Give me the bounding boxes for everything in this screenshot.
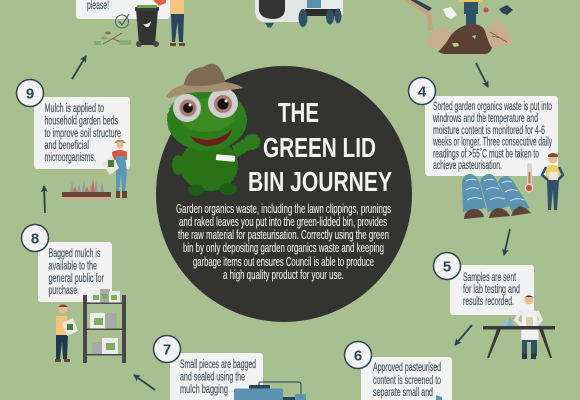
badge 6: 6 bbox=[354, 348, 362, 364]
icon: check mark bbox=[116, 14, 129, 28]
frog mouth bbox=[190, 129, 232, 146]
arrow bbox=[44, 186, 45, 213]
title: BIN JOURNEY bbox=[248, 166, 392, 197]
icon: person bbox=[153, 0, 185, 46]
intro paragraph: Garden organics waste, including the lawn clippings, prunings bbox=[176, 202, 391, 216]
card bbox=[425, 96, 558, 176]
frog eyes bbox=[173, 88, 238, 122]
card text bbox=[48, 248, 104, 297]
card text: Bagged mulch is bbox=[48, 248, 101, 260]
badge 4 bbox=[408, 78, 436, 104]
step 6 panel bbox=[344, 342, 452, 400]
badge 7: 7 bbox=[163, 342, 171, 358]
card text bbox=[180, 359, 256, 396]
badge 8: 8 bbox=[31, 230, 39, 248]
icon: person with clipboard bbox=[542, 153, 563, 210]
intro paragraph bbox=[176, 202, 391, 282]
card text: and sealed using the bbox=[180, 372, 245, 384]
card text: microorganisms. bbox=[44, 152, 96, 164]
step 2 illustration: collection truck bbox=[255, 0, 343, 28]
card text: separate small and bbox=[373, 387, 433, 399]
frog hat bbox=[166, 64, 243, 98]
card text bbox=[373, 362, 441, 399]
card text: Samples are sent bbox=[463, 272, 516, 284]
card text bbox=[463, 272, 520, 308]
card text: general public for bbox=[48, 273, 104, 285]
card text bbox=[44, 103, 121, 164]
icon: gardener with bag bbox=[102, 140, 127, 198]
card text: purchase. bbox=[48, 285, 79, 297]
intro paragraph: bin by only depositing garden organics waste and keeping bbox=[183, 241, 384, 255]
arrow bbox=[134, 375, 155, 390]
icon: garden bed bbox=[62, 178, 111, 200]
intro paragraph: the raw material for pasteurisation. Correctly using the green bbox=[178, 228, 389, 242]
card bbox=[361, 357, 452, 400]
intro paragraph: a high quality product for your use. bbox=[223, 268, 344, 282]
step 3 illustration: sorting and compost piles bbox=[404, 0, 513, 54]
card bbox=[170, 353, 263, 400]
icon: screener bbox=[436, 395, 442, 400]
badge 7 bbox=[154, 336, 180, 362]
icon: person holding bag bbox=[55, 304, 78, 362]
card text: please! bbox=[87, 0, 109, 12]
icon: green lid bin bbox=[135, 5, 159, 47]
badge 9: 9 bbox=[26, 86, 34, 102]
step 8 panel bbox=[22, 224, 126, 363]
dark compost pile bbox=[438, 24, 492, 54]
card text: content is screened to bbox=[373, 375, 441, 387]
card text: to improve soil structure bbox=[44, 128, 121, 140]
icon: scientist at table bbox=[483, 296, 555, 359]
card text: available to the bbox=[48, 260, 97, 272]
mascot: green frog with hat bbox=[166, 64, 260, 196]
title: GREEN LID bbox=[263, 132, 376, 163]
card text: Mulch is applied to bbox=[44, 103, 104, 115]
excavator arm bbox=[404, 0, 433, 30]
card bbox=[76, 0, 170, 19]
card bbox=[38, 242, 112, 302]
card text: results recorded. bbox=[463, 296, 514, 308]
tan pile left bbox=[426, 27, 452, 49]
step 9 panel bbox=[16, 80, 130, 200]
person on pile bbox=[459, 0, 483, 30]
icon: mulch bagging machine bbox=[234, 382, 306, 400]
flying items bbox=[443, 7, 457, 19]
icon: garden clippings bbox=[94, 32, 131, 45]
arrow bbox=[455, 325, 472, 345]
arrow bbox=[72, 56, 86, 79]
tan pile right bbox=[480, 19, 513, 48]
step 5 panel bbox=[434, 252, 555, 359]
intro paragraph: garbage items out ensures Council is able to produce bbox=[193, 255, 374, 269]
badge 4: 4 bbox=[418, 84, 427, 100]
icon: thermometer bbox=[524, 163, 534, 192]
card text: Approved pasteurised bbox=[373, 362, 441, 374]
badge 5: 5 bbox=[443, 258, 451, 276]
card bbox=[34, 97, 130, 169]
central dark circle panel bbox=[156, 66, 412, 322]
step 4 panel bbox=[408, 78, 563, 219]
intro paragraph: and raked leaves you put into the green-lidded bin, provides bbox=[179, 215, 387, 229]
card text: Small pieces are bagged bbox=[180, 359, 256, 371]
step 3 panel: clipped text card with bin and person bbox=[76, 0, 185, 47]
card text: and beneficial bbox=[44, 140, 89, 152]
card bbox=[450, 265, 534, 315]
title bbox=[248, 97, 392, 197]
icon: windrows bbox=[462, 174, 531, 219]
card text: achieve pasteurisation. bbox=[433, 160, 502, 172]
card text: household garden beds bbox=[44, 116, 118, 128]
frog badge bbox=[216, 154, 235, 162]
card text: for lab testing and bbox=[463, 284, 520, 296]
card text bbox=[432, 101, 552, 172]
title: THE bbox=[278, 97, 319, 128]
card text: mulch bagging bbox=[180, 384, 228, 396]
icon: shelf with mulch bags bbox=[83, 289, 126, 363]
step 7 panel bbox=[154, 336, 306, 400]
arrow bbox=[504, 229, 510, 255]
arrow bbox=[476, 63, 488, 87]
